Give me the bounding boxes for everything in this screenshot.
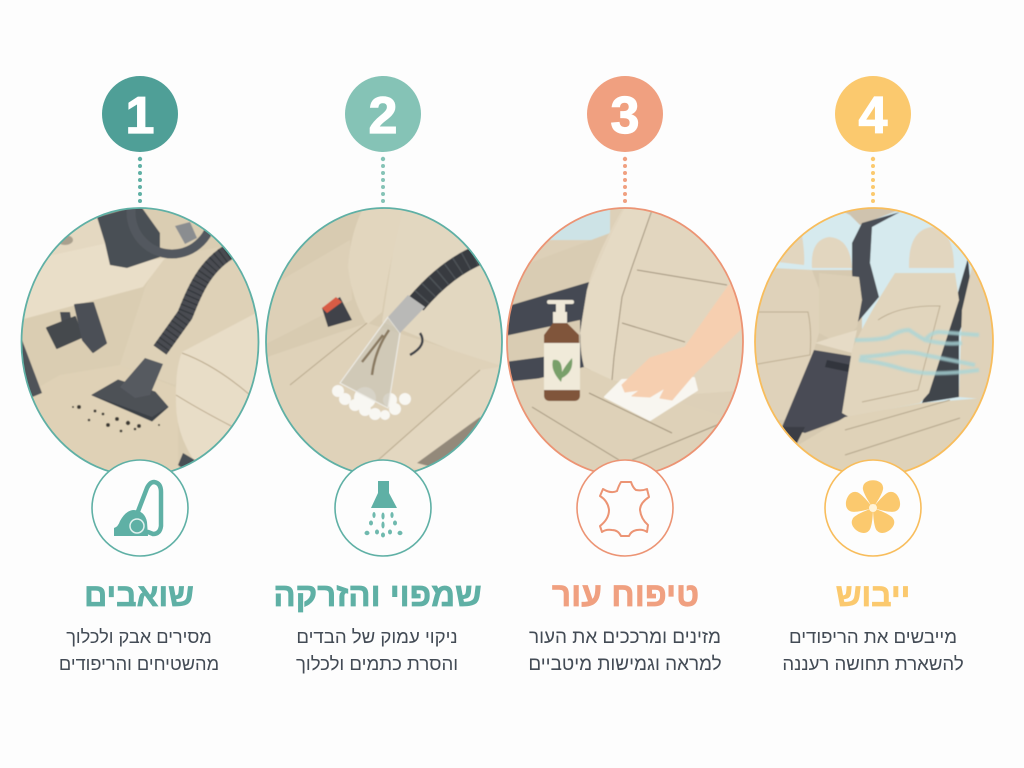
- number badge 2: 2: [369, 87, 397, 145]
- illustration outline 4: [755, 208, 993, 476]
- illustration outline 1: [22, 208, 258, 476]
- illustration: vacuum hose on car carpet: [22, 208, 258, 470]
- illustration: air flow drying car seats: [752, 205, 997, 480]
- description 1: מהשטיחים והריפודים: [59, 654, 219, 674]
- illustration outline 2: [266, 208, 502, 476]
- description 3: למראה וגמישות מיטביים: [528, 654, 722, 675]
- connector 1: [138, 157, 142, 203]
- description 3: מזינים ומרככים את העור: [529, 627, 721, 648]
- number badge 3: [587, 76, 663, 152]
- illustration: extractor nozzle on seat: [264, 205, 505, 480]
- description 4: להשארת תחושה רעננה: [782, 653, 964, 674]
- heading 2: שמפוי והזרקה: [273, 576, 482, 613]
- number badge 1: [102, 76, 178, 152]
- description 3: [528, 627, 722, 675]
- number badge 3: 3: [611, 87, 639, 145]
- description 2: והסרת כתמים ולכלוך: [296, 653, 458, 674]
- description 2: [296, 626, 458, 674]
- illustration: hand wiping leather seat with cloth: [505, 205, 750, 480]
- number badge 4: [835, 76, 911, 152]
- step 1: vacuuming: [15, 76, 262, 674]
- description 1: מסירים אבק ולכלוך: [66, 627, 212, 647]
- icon: leather hide: [577, 460, 673, 556]
- connector 2: [381, 157, 385, 203]
- icon: vacuum cleaner: [92, 460, 188, 556]
- step 2: shampoo and injection: [264, 76, 505, 674]
- description 2: ניקוי עמוק של הבדים: [296, 626, 458, 647]
- step 4: drying: [752, 76, 997, 674]
- step 3: leather care: [505, 76, 750, 675]
- number badge 4: 4: [859, 87, 888, 145]
- number badge 1: 1: [126, 87, 154, 145]
- icon: spray nozzle: [335, 460, 431, 556]
- heading 1: שואבים: [84, 577, 194, 613]
- heading 4: ייבוש: [836, 577, 910, 613]
- number badge 2: [345, 76, 421, 152]
- description 4: [782, 626, 964, 674]
- description 4: מייבשים את הריפודים: [789, 626, 957, 647]
- illustration outline 3: [507, 208, 743, 476]
- connector 3: [623, 157, 627, 203]
- description 1: [59, 627, 219, 674]
- connector 4: [871, 157, 875, 203]
- icon: fan: [825, 460, 921, 556]
- heading 3: טיפוח עור: [552, 577, 699, 614]
